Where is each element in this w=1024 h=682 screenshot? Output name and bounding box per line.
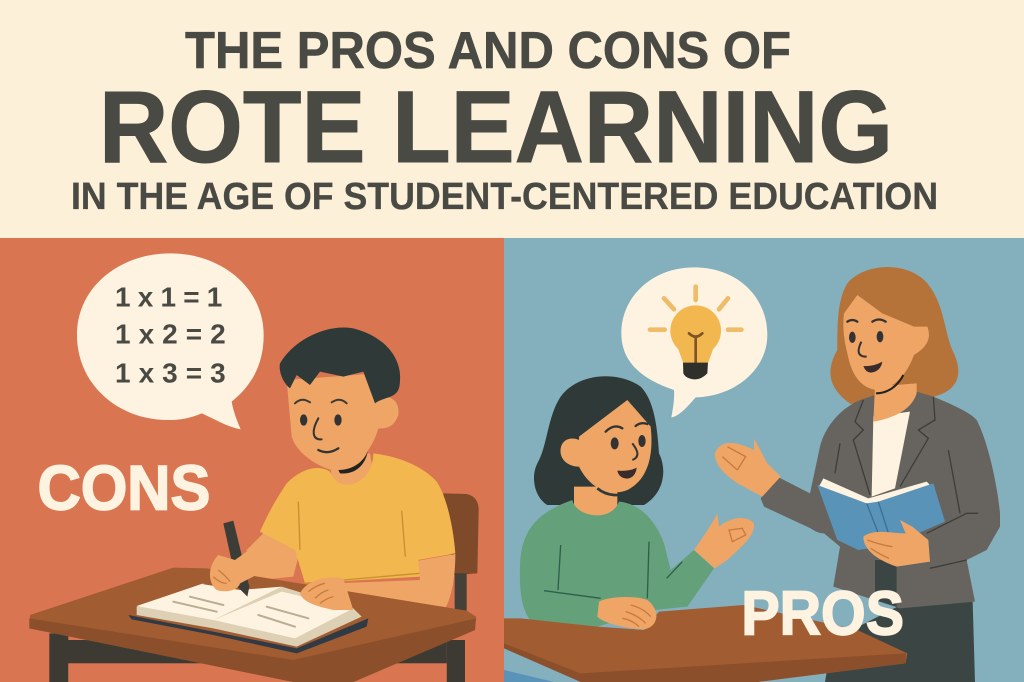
arm holding pen: [247, 527, 300, 580]
speech bubble: multiplication table: 1 x 1 = 1: [115, 281, 222, 312]
title line: the pros and cons of: THE PROS AND CONS OF: [185, 22, 791, 80]
resting hand: [300, 577, 353, 610]
neck: [574, 487, 617, 520]
white shirt: [872, 412, 910, 497]
hair back: [830, 267, 958, 404]
green sweater: [520, 500, 714, 628]
student boy: [247, 327, 455, 610]
pants: [825, 602, 975, 682]
speech bubble: multiplication table: 1 x 2 = 2: [115, 319, 226, 350]
hair: [280, 327, 400, 403]
raised hand: [715, 438, 781, 497]
desk: [504, 605, 907, 682]
open book: [128, 583, 368, 653]
desk: [29, 568, 476, 682]
face details: [847, 319, 886, 322]
chair: [443, 493, 479, 611]
title: [71, 22, 938, 218]
book hand: [863, 520, 930, 567]
blazer lines: [835, 397, 978, 568]
head: [287, 373, 399, 472]
speech bubble: light bulb: [621, 267, 767, 417]
heading: pros: PROS: [741, 580, 904, 649]
title line: rote learning: ROTE LEARNING: [99, 70, 893, 184]
face details: [295, 400, 347, 403]
blazer: [761, 392, 1000, 608]
neck: [330, 453, 375, 490]
hair back: [534, 376, 663, 505]
heading: cons: CONS: [38, 453, 210, 523]
header panel: [0, 0, 1024, 238]
icon: light bulb: [650, 287, 741, 379]
teacher: [715, 267, 1000, 682]
panel: pros: [504, 238, 1024, 682]
pen: [223, 521, 249, 597]
student girl: [520, 376, 754, 628]
raised hand: [694, 513, 754, 568]
open book: [817, 478, 945, 550]
right arm: [333, 554, 455, 610]
face details: [606, 423, 647, 432]
speech bubble: multiplication table: 1 x 3 = 3: [115, 358, 226, 389]
writing hand: [210, 552, 257, 591]
panel: cons: [0, 238, 504, 682]
girl resting hand: [597, 597, 656, 629]
dark gap under book: [875, 560, 897, 607]
speech bubble: multiplication table: [77, 253, 264, 429]
yellow shirt: [260, 453, 455, 583]
neck: [873, 383, 917, 422]
head: [560, 400, 651, 492]
head: [843, 295, 929, 390]
subtitle: IN THE AGE OF STUDENT-CENTERED EDUCATION: [71, 176, 938, 218]
